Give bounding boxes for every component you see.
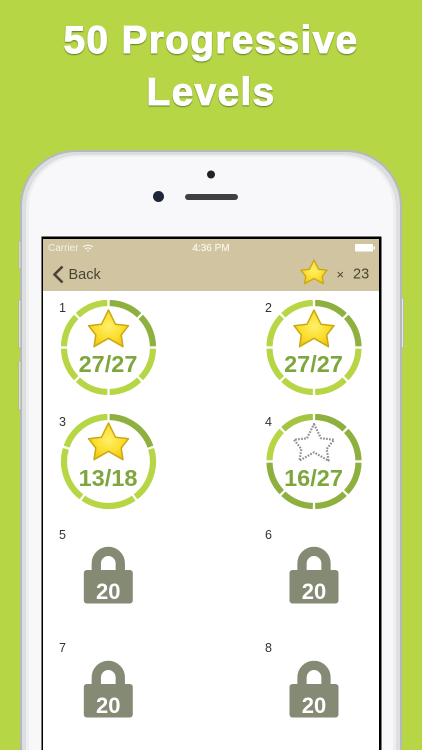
- star counter: ×: [336, 267, 344, 282]
- front sensor: [207, 170, 215, 178]
- lock number: 20: [96, 693, 121, 718]
- level 5: 5: [59, 528, 66, 542]
- level 7: [59, 641, 133, 718]
- back chevron: [54, 266, 62, 282]
- lock number: 20: [96, 579, 121, 604]
- lock: [290, 665, 338, 718]
- level 1: [46, 285, 171, 410]
- level 2: [251, 285, 377, 410]
- star counter icon: [301, 260, 327, 284]
- lock: [290, 551, 338, 604]
- front camera: [153, 191, 164, 202]
- level 4: 4: [265, 415, 272, 429]
- score: 16/27: [284, 465, 343, 491]
- dotted empty star: [294, 424, 334, 461]
- score: 13/18: [79, 465, 137, 491]
- level 3: 3: [59, 415, 66, 429]
- star: [88, 310, 128, 347]
- level 6: 6: [265, 528, 272, 542]
- screen: [42, 236, 382, 750]
- score: 27/27: [79, 351, 137, 377]
- phone body: [20, 150, 402, 750]
- lock number: 20: [302, 579, 326, 604]
- score: 27/27: [284, 351, 343, 377]
- back label: Back: [68, 267, 101, 283]
- level 5: [59, 528, 133, 604]
- status bar: battery: [355, 244, 375, 252]
- level 6: [265, 528, 338, 604]
- level 4: [251, 399, 377, 524]
- navigation bar: [43, 239, 379, 291]
- navigation bar: 23: [353, 266, 369, 282]
- lock: [84, 665, 133, 718]
- speaker: [185, 194, 238, 200]
- side buttons: [19, 241, 404, 410]
- lock: [84, 551, 133, 604]
- ring 8 segments: [251, 285, 377, 410]
- status bar: time: 4:36 PM: [192, 243, 230, 254]
- title: Levels: [147, 71, 275, 114]
- level 3: [46, 399, 171, 524]
- ring 8 segments: [46, 285, 171, 410]
- ring 8 segments: [251, 399, 377, 524]
- level 7: 7: [59, 641, 66, 655]
- star: [88, 423, 128, 460]
- star: [294, 310, 334, 347]
- status bar: wifi icon: [83, 245, 93, 251]
- lock number: 20: [302, 693, 326, 718]
- title: [63, 19, 359, 114]
- level 8: 8: [265, 641, 272, 655]
- status bar: carrier: Carrier: [48, 243, 79, 254]
- title: 50 Progressive: [63, 19, 359, 62]
- level 2: 2: [265, 301, 272, 315]
- level 8: [265, 641, 338, 718]
- ring 5 segments: [46, 399, 171, 524]
- level 1: 1: [59, 301, 66, 315]
